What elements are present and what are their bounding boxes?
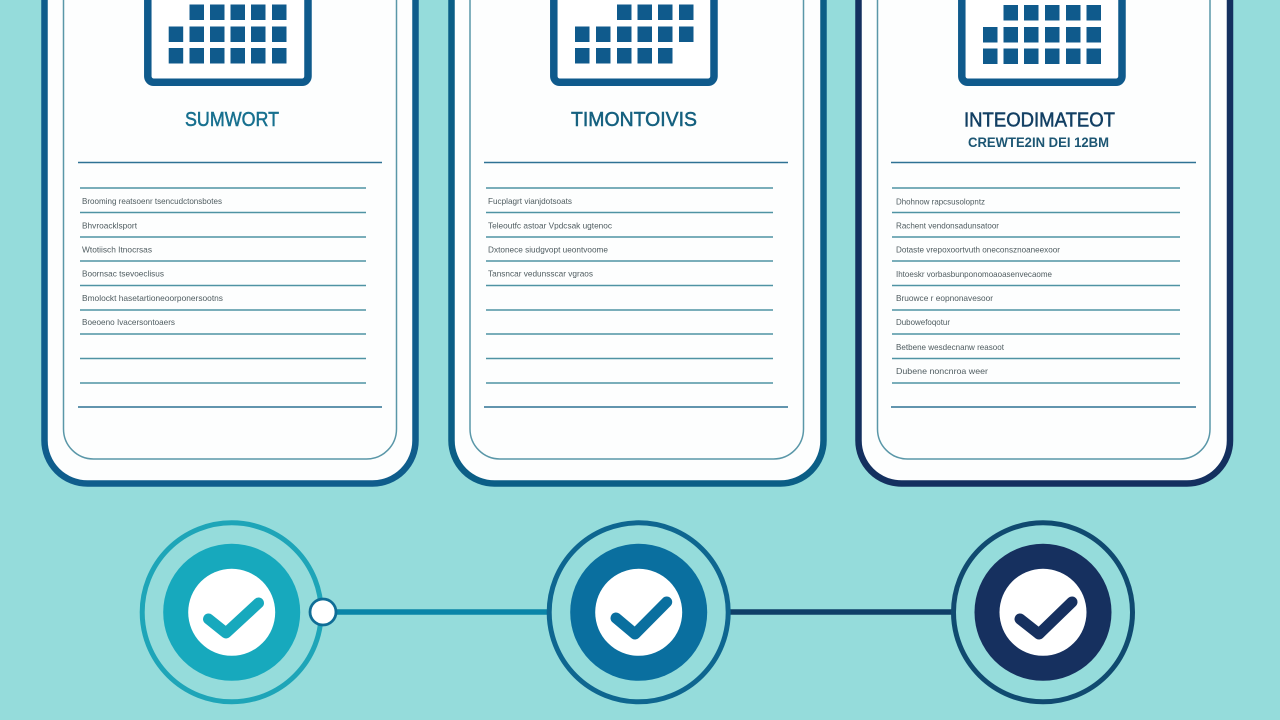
list: intermediate rows: Ihtoeskr vorbasbunponomoaoasenvecaome bbox=[896, 269, 1052, 279]
list: intermediate rows: Betbene wesdecnanw reasoot bbox=[896, 342, 1005, 352]
panel: timontoivis card bbox=[452, 0, 824, 484]
list: intermediate rows bbox=[891, 162, 1196, 407]
icon: calendar bbox=[962, 0, 1122, 82]
icon: first check badge bbox=[142, 523, 321, 702]
list: intermediate rows: Dotaste vrepoxoortvuth oneconsznoaneexoor bbox=[896, 244, 1060, 254]
heading: support: SUMWORT bbox=[185, 109, 279, 131]
heading: intermediate: INTEODIMATEOT bbox=[964, 110, 1115, 132]
icon: second check badge bbox=[549, 523, 728, 702]
icon: third check badge bbox=[954, 523, 1132, 702]
list: support rows: Bhvroacklsport bbox=[82, 220, 138, 230]
icon: calendar bbox=[554, 0, 714, 82]
list: timontoivis rows: Fucplagrt vianjdotsoats bbox=[488, 196, 572, 206]
list: timontoivis rows: Dxtonece siudgvopt ueontvoome bbox=[488, 244, 608, 254]
panel: support card bbox=[44, 0, 416, 484]
subheading: intermediate: CREWTE2IN DEI 12BM bbox=[968, 135, 1109, 150]
list: support rows: Wtotiisch Itnocrsas bbox=[82, 244, 152, 254]
list: support rows: Brooming reatsoenr tsencudctonsbotes bbox=[82, 196, 222, 206]
arrow: connector two to three bbox=[730, 609, 953, 615]
list: intermediate rows: Dubene noncnroa weer bbox=[896, 366, 988, 376]
icon: calendar bbox=[148, 0, 308, 82]
list: support rows: Bmolockt hasetartioneoorponersootns bbox=[82, 293, 223, 303]
icon: connector node bbox=[310, 599, 336, 625]
arrow: connector one to two bbox=[335, 609, 548, 615]
list: timontoivis rows bbox=[484, 162, 788, 407]
list: intermediate rows: Rachent vendonsadunsatoor bbox=[896, 220, 999, 230]
list: support rows: Boeoeno Ivacersontoaers bbox=[82, 317, 175, 327]
list: intermediate rows: Dubowefoqotur bbox=[896, 317, 950, 327]
list: intermediate rows: Bruowce r eopnonavesoor bbox=[896, 293, 993, 303]
list: support rows: Boornsac tsevoeclisus bbox=[82, 268, 164, 278]
list: timontoivis rows: Teleoutfc astoar Vpdcsak ugtenoc bbox=[488, 220, 613, 230]
list: intermediate rows: Dhohnow rapcsusolopntz bbox=[896, 196, 985, 206]
list: support rows bbox=[78, 162, 382, 407]
list: timontoivis rows: Tansncar vedunsscar vgraos bbox=[488, 268, 593, 278]
heading: timontoivis: TIMONTOIVIS bbox=[571, 109, 697, 131]
panel: intermediate card bbox=[858, 0, 1230, 484]
